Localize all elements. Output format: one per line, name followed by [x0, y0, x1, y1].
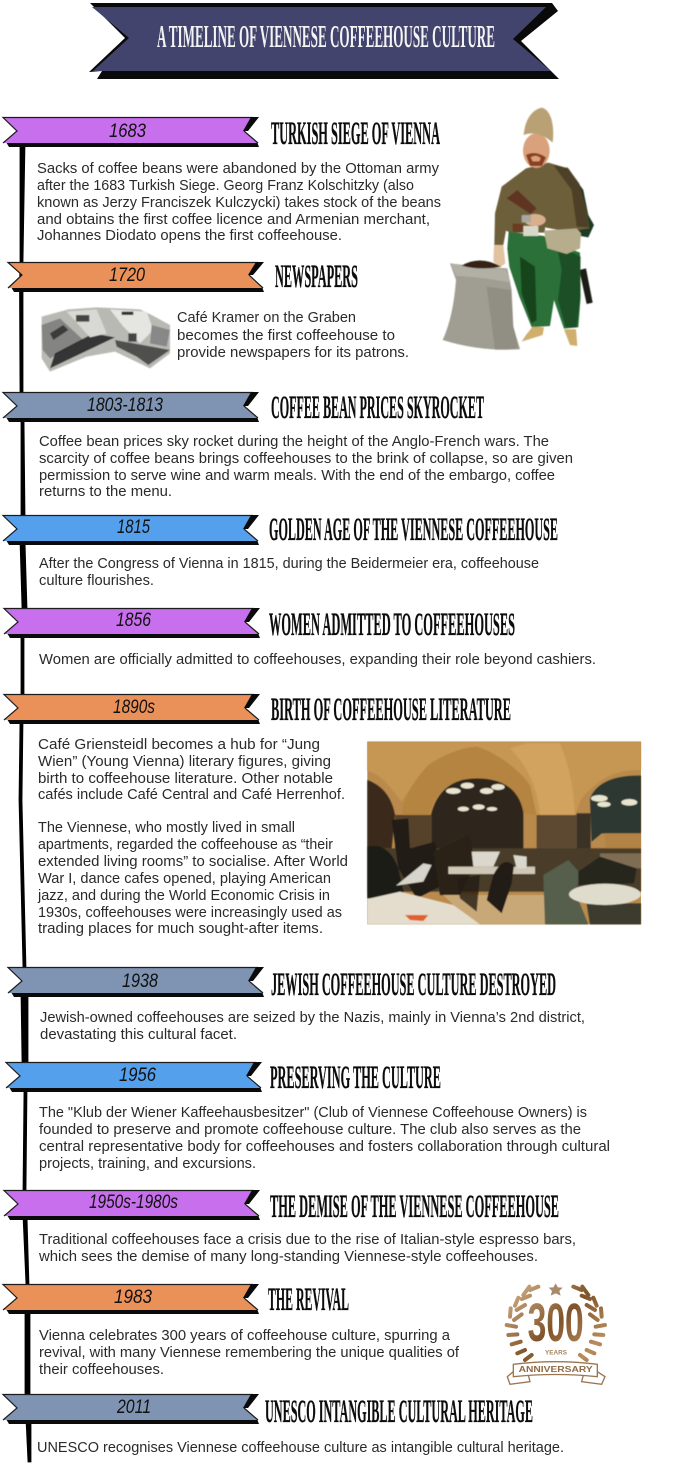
body text: Johannes Diodato opens the first coffeehouse.: [37, 228, 342, 244]
number 300: 300: [528, 1294, 584, 1353]
body text paragraph 1: Wien” (Young Vienna) literary figures, giving: [38, 754, 331, 770]
year ribbon 1803-1813: [3, 392, 259, 422]
body text: and obtains the first coffee licence and Armenian merchant,: [37, 212, 430, 228]
body text paragraph 1: [38, 737, 345, 803]
body text: central representative body for coffeehouses and fosters collaboration through cultural: [39, 1139, 610, 1155]
body text: [38, 1232, 576, 1265]
painting: interior of Café Griensteidl: [367, 742, 641, 924]
body text: [39, 556, 539, 589]
body text: Traditional coffeehouses face a crisis due to the rise of Italian-style espresso bars,: [39, 1232, 576, 1248]
year ribbon 1720: 1720: [109, 265, 145, 286]
entry: 1938 Jewish coffeehouse culture: [8, 967, 585, 1043]
laurel leaves: [507, 1287, 605, 1360]
entry: 1983 the revival: THE REVIVAL: [268, 1282, 349, 1318]
floor and tables: [443, 895, 547, 924]
body text: Café Kramer on the Graben: [177, 310, 356, 326]
star: [549, 1283, 563, 1296]
year ribbon 1720: [8, 262, 264, 292]
body text: revival, with many Viennese remembering the unique qualities of: [39, 1345, 460, 1361]
year ribbon 1803-1813: 1803-1813: [87, 395, 163, 416]
body text: Sacks of coffee beans were abandoned by the Ottoman army: [37, 161, 440, 177]
year ribbon 1815: 1815: [117, 517, 150, 538]
body text paragraph 1: birth to coffeehouse literature. Other notable: [38, 771, 333, 787]
body text: Coffee bean prices sky rocket during the height of the Anglo-French wars. The: [39, 434, 549, 450]
year ribbon 1983: 1983: [114, 1287, 152, 1308]
entry: 1815 golden age: [3, 512, 558, 589]
body text paragraph 2: War I, dance cafes opened, playing American: [38, 871, 331, 887]
body text: projects, training, and excursions.: [39, 1156, 256, 1172]
body text: [37, 161, 441, 244]
title banner: [89, 3, 559, 79]
body text paragraph 2: apartments, regarded the coffeehouse as “their: [38, 837, 333, 853]
body text paragraph 1: Café Griensteidl becomes a hub for “Jung: [38, 737, 320, 753]
body text: [39, 1328, 460, 1378]
year ribbon 1890s: [4, 694, 260, 724]
lamps: [446, 783, 637, 811]
year ribbon 1950s-1980s: 1950s-1980s: [89, 1192, 178, 1213]
body text: culture flourishes.: [39, 573, 154, 589]
anniversary ribbon: ANNIVERSARY: [519, 1365, 594, 1374]
body text: known as Jerzy Franciszek Kulczycki) takes stock of the beans: [37, 195, 441, 211]
body text: scarcity of coffee beans brings coffeehouses to the brink of collapse, so are given: [39, 451, 573, 467]
year ribbon 1856: 1856: [116, 610, 151, 631]
year ribbon 1956: 1956: [119, 1065, 156, 1086]
entry: 1890s coffeehouse literature: [4, 692, 641, 937]
year ribbon 1983: [3, 1284, 259, 1314]
body text: permission to serve wine and warm meals. With the end of the embargo, coffee: [39, 468, 555, 484]
entry: 1956 preserving the culture: [6, 1060, 610, 1172]
timeline vertical line: [19, 143, 31, 1462]
body text: after the 1683 Turkish Siege. Georg Franz Kolschitzky (also: [37, 178, 414, 194]
year ribbon 2011: 2011: [116, 1397, 151, 1418]
body text paragraph 2: trading places for much sought-after items.: [38, 921, 323, 937]
icon: 300 years anniversary wreath: [507, 1283, 605, 1384]
year ribbon 1938: 1938: [122, 971, 158, 992]
body text: returns to the menu.: [39, 484, 172, 500]
body text: [177, 310, 409, 361]
body text: [39, 1105, 610, 1172]
crowd band: [367, 848, 641, 892]
entry: 1856 women admitted: [4, 607, 596, 668]
body text paragraph 1: cafés include Café Central and Café Herrenhof.: [38, 787, 345, 803]
entry: 1683 Turkish siege: [3, 116, 441, 244]
body text: Women are officially admitted to coffeehouses, expanding their role beyond cashiers.: [39, 652, 596, 668]
body text paragraph 2: [37, 820, 348, 937]
body text: [40, 1010, 585, 1043]
body text paragraph 2: 1930s, coffeehouses were increasingly used as: [38, 905, 342, 921]
body text: provide newspapers for its patrons.: [177, 345, 409, 361]
year ribbon 1938: [8, 967, 264, 997]
body text: which sees the demise of many long-standing Viennese-style coffeehouses.: [38, 1249, 538, 1265]
body text: Vienna celebrates 300 years of coffeehouse culture, spurring a: [39, 1328, 451, 1344]
body text: The "Klub der Wiener Kaffeehausbesitzer" (Club of Viennese Coffeehouse Owners) is: [39, 1105, 587, 1121]
vaults: [367, 742, 641, 815]
year ribbon 1683: [3, 117, 259, 147]
body text: their coffeehouses.: [39, 1362, 164, 1378]
year ribbon 1890s: 1890s: [113, 697, 155, 718]
entry: 1803-1813 prices: [3, 390, 573, 500]
body text paragraph 2: extended living rooms” to socialise. After World: [38, 854, 348, 870]
body text: Jewish-owned coffeehouses are seized by the Nazis, mainly in Vienna’s 2nd district,: [40, 1010, 585, 1026]
year ribbon 1950s-1980s: [4, 1190, 260, 1220]
body text: [39, 434, 573, 500]
year ribbon 1856: [4, 608, 260, 638]
body text: UNESCO recognises Viennese coffeehouse culture as intangible cultural heritage.: [37, 1440, 564, 1456]
year ribbon 1683: 1683: [109, 121, 146, 142]
entry: 1720 newspapers: NEWSPAPERS: [275, 259, 358, 295]
body text: After the Congress of Vienna in 1815, during the Beidermeier era, coffeehouse: [39, 556, 539, 572]
entry: 1720 newspapers: [8, 259, 409, 372]
entry: 1950s-1980s demise: [4, 1189, 576, 1265]
entry: 2011 UNESCO: [3, 1394, 564, 1456]
YEARS: YEARS: [545, 1349, 568, 1356]
illustration: newspapers: [42, 307, 170, 372]
body text: becomes the first coffeehouse to: [177, 328, 395, 344]
body text paragraph 2: The Viennese, who mostly lived in small: [38, 820, 295, 836]
body text paragraph 2: jazz, and during the World Economic Crisis in: [37, 888, 330, 904]
body text: founded to preserve and promote coffeehouse culture. The club also serves as the: [39, 1122, 581, 1138]
entry: 1983 the revival: [3, 1282, 605, 1384]
illustration: Ottoman man with coffee sack: [443, 108, 594, 350]
body text: devastating this cultural facet.: [40, 1027, 237, 1043]
year ribbon 2011: [3, 1394, 259, 1424]
year ribbon 1815: [3, 515, 259, 545]
year ribbon 1956: [6, 1062, 262, 1092]
arches: [367, 780, 395, 848]
